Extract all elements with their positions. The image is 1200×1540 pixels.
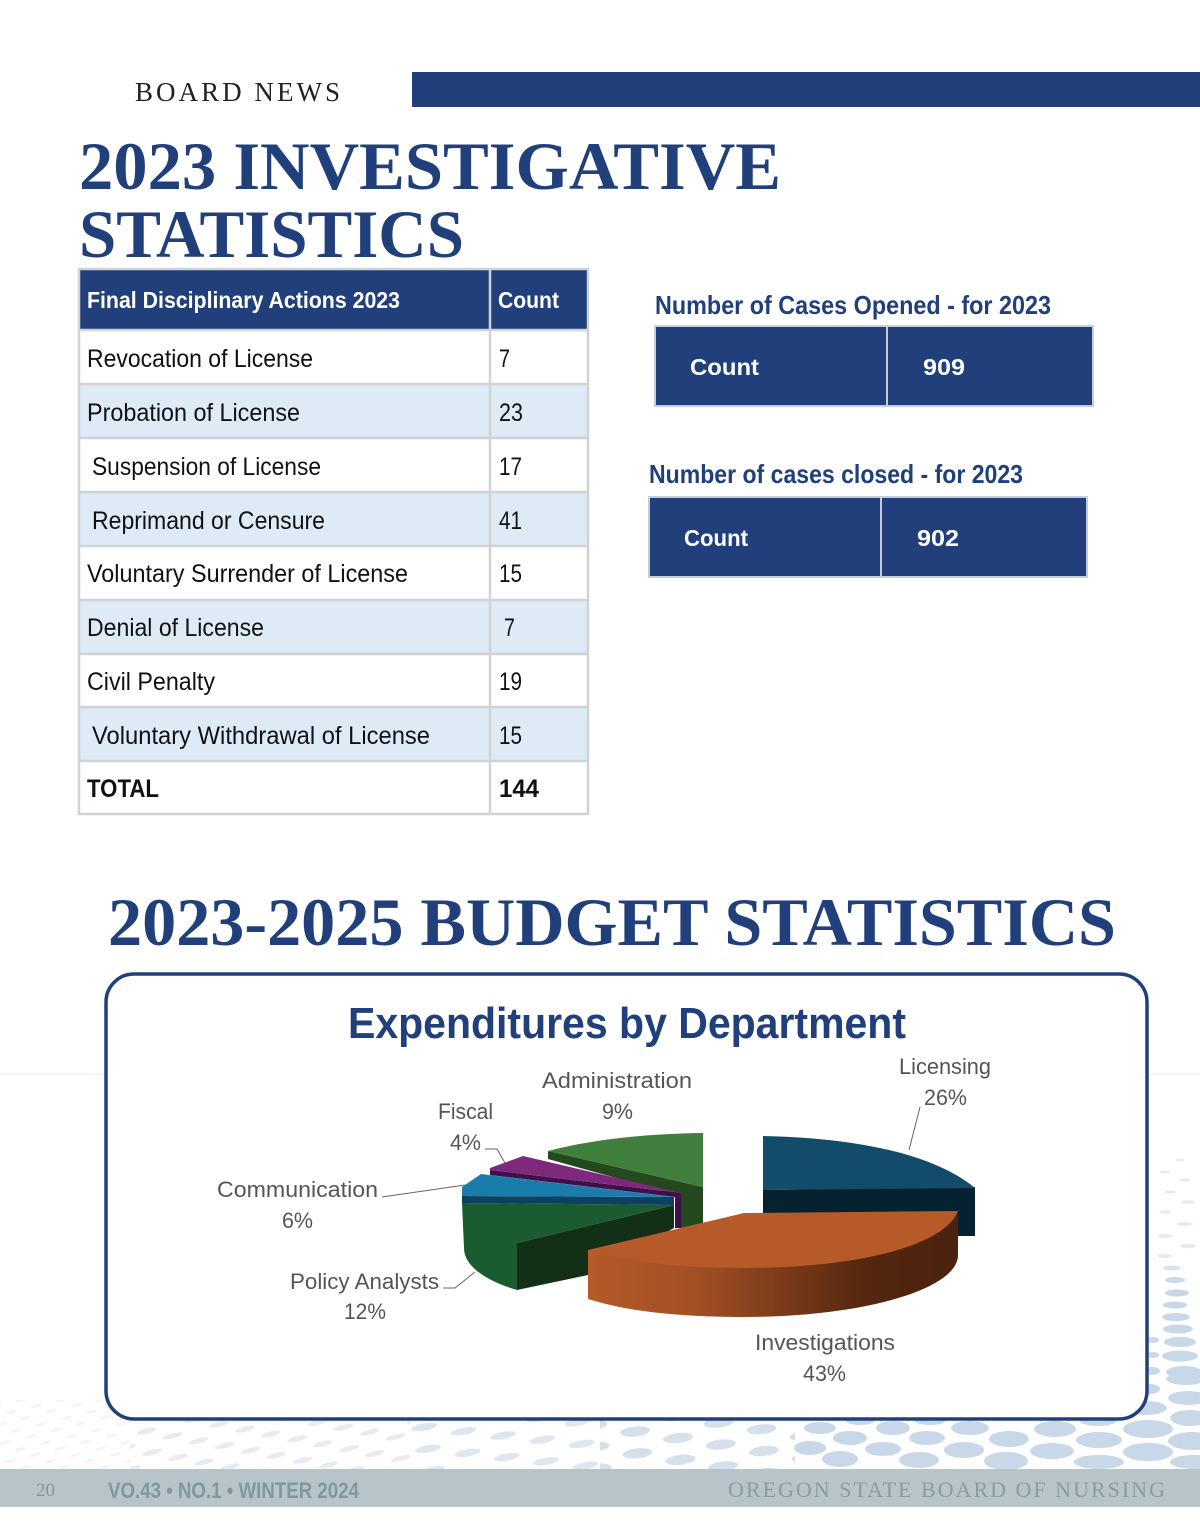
table body rows: 19 [499, 668, 522, 696]
title: budget statistics: 2023-2025 BUDGET STATISTICS [108, 884, 1116, 960]
heading: cases opened: Number of Cases Opened - for 2023 [655, 290, 1051, 320]
chart labels [217, 1054, 991, 1386]
slice: fiscal [490, 1156, 681, 1228]
chart labels: Policy Analysts [290, 1269, 439, 1294]
chart labels: Investigations [755, 1330, 895, 1355]
chart labels: 6% [282, 1208, 313, 1233]
title: investigative statistics: STATISTICS [79, 196, 464, 272]
slice: policy analysts [462, 1203, 674, 1290]
chart title: Expenditures by Department [348, 999, 906, 1048]
table body rows: 7 [504, 614, 515, 642]
header bar [412, 72, 1200, 107]
slice: administration [548, 1133, 703, 1228]
title: investigative statistics [79, 128, 781, 272]
title: investigative statistics: 2023 INVESTIGATIVE [79, 128, 781, 204]
chart labels: 26% [924, 1085, 967, 1110]
chart labels: 4% [450, 1130, 481, 1155]
footer bar: 20 [36, 1480, 55, 1501]
table body rows [87, 345, 539, 803]
table body rows: TOTAL [87, 775, 159, 803]
chart labels: Communication [217, 1177, 378, 1202]
table body rows: 15 [499, 722, 522, 750]
table: cases closed: 902 [917, 525, 959, 551]
table body rows: Voluntary Withdrawal of License [92, 722, 430, 750]
table body rows: Civil Penalty [87, 668, 215, 696]
table body rows: 144 [499, 775, 539, 803]
slice: licensing [763, 1136, 975, 1236]
pie chart [462, 1133, 975, 1317]
leader lines [382, 1107, 920, 1288]
chart labels: Fiscal [438, 1099, 493, 1124]
table body rows: Voluntary Surrender of License [87, 560, 408, 588]
section label: board news: BOARD NEWS [135, 77, 340, 107]
table body rows: 17 [499, 453, 522, 481]
table body rows: 41 [499, 507, 522, 535]
table body rows: Denial of License [87, 614, 264, 642]
table body rows: Suspension of License [92, 453, 321, 481]
table: final disciplinary actions [79, 269, 588, 814]
table: cases opened [655, 326, 1093, 406]
table body rows: 7 [499, 345, 510, 373]
chart labels: 12% [344, 1299, 386, 1324]
table body rows: Probation of License [87, 399, 300, 427]
chart labels: Administration [542, 1068, 692, 1093]
table body rows: Reprimand or Censure [92, 507, 325, 535]
footer bar: OREGON STATE BOARD OF NURSING [728, 1477, 1165, 1502]
table body rows: 23 [499, 399, 523, 427]
footer bar [0, 1469, 1200, 1507]
table header row: Count [498, 287, 559, 313]
table: cases closed: Count [684, 525, 748, 551]
slice: communication [462, 1174, 674, 1205]
heading: cases closed: Number of cases closed - for 2023 [649, 459, 1023, 489]
table header row: Final Disciplinary Actions 2023 [87, 287, 400, 313]
panel: expenditures by department [106, 974, 1147, 1419]
footer bar: VO.43 • NO.1 • WINTER 2024 [108, 1478, 360, 1503]
background dot pattern [0, 1074, 1200, 1470]
table: cases opened: Count [690, 354, 759, 380]
chart labels: 9% [602, 1099, 633, 1124]
chart labels: 43% [803, 1361, 846, 1386]
table body rows: Revocation of License [87, 345, 313, 373]
table body rows: 15 [499, 560, 522, 588]
chart labels: Licensing [899, 1054, 991, 1079]
table: cases closed [649, 497, 1087, 577]
table: cases opened: 909 [923, 354, 965, 380]
slice: investigations [588, 1211, 958, 1317]
